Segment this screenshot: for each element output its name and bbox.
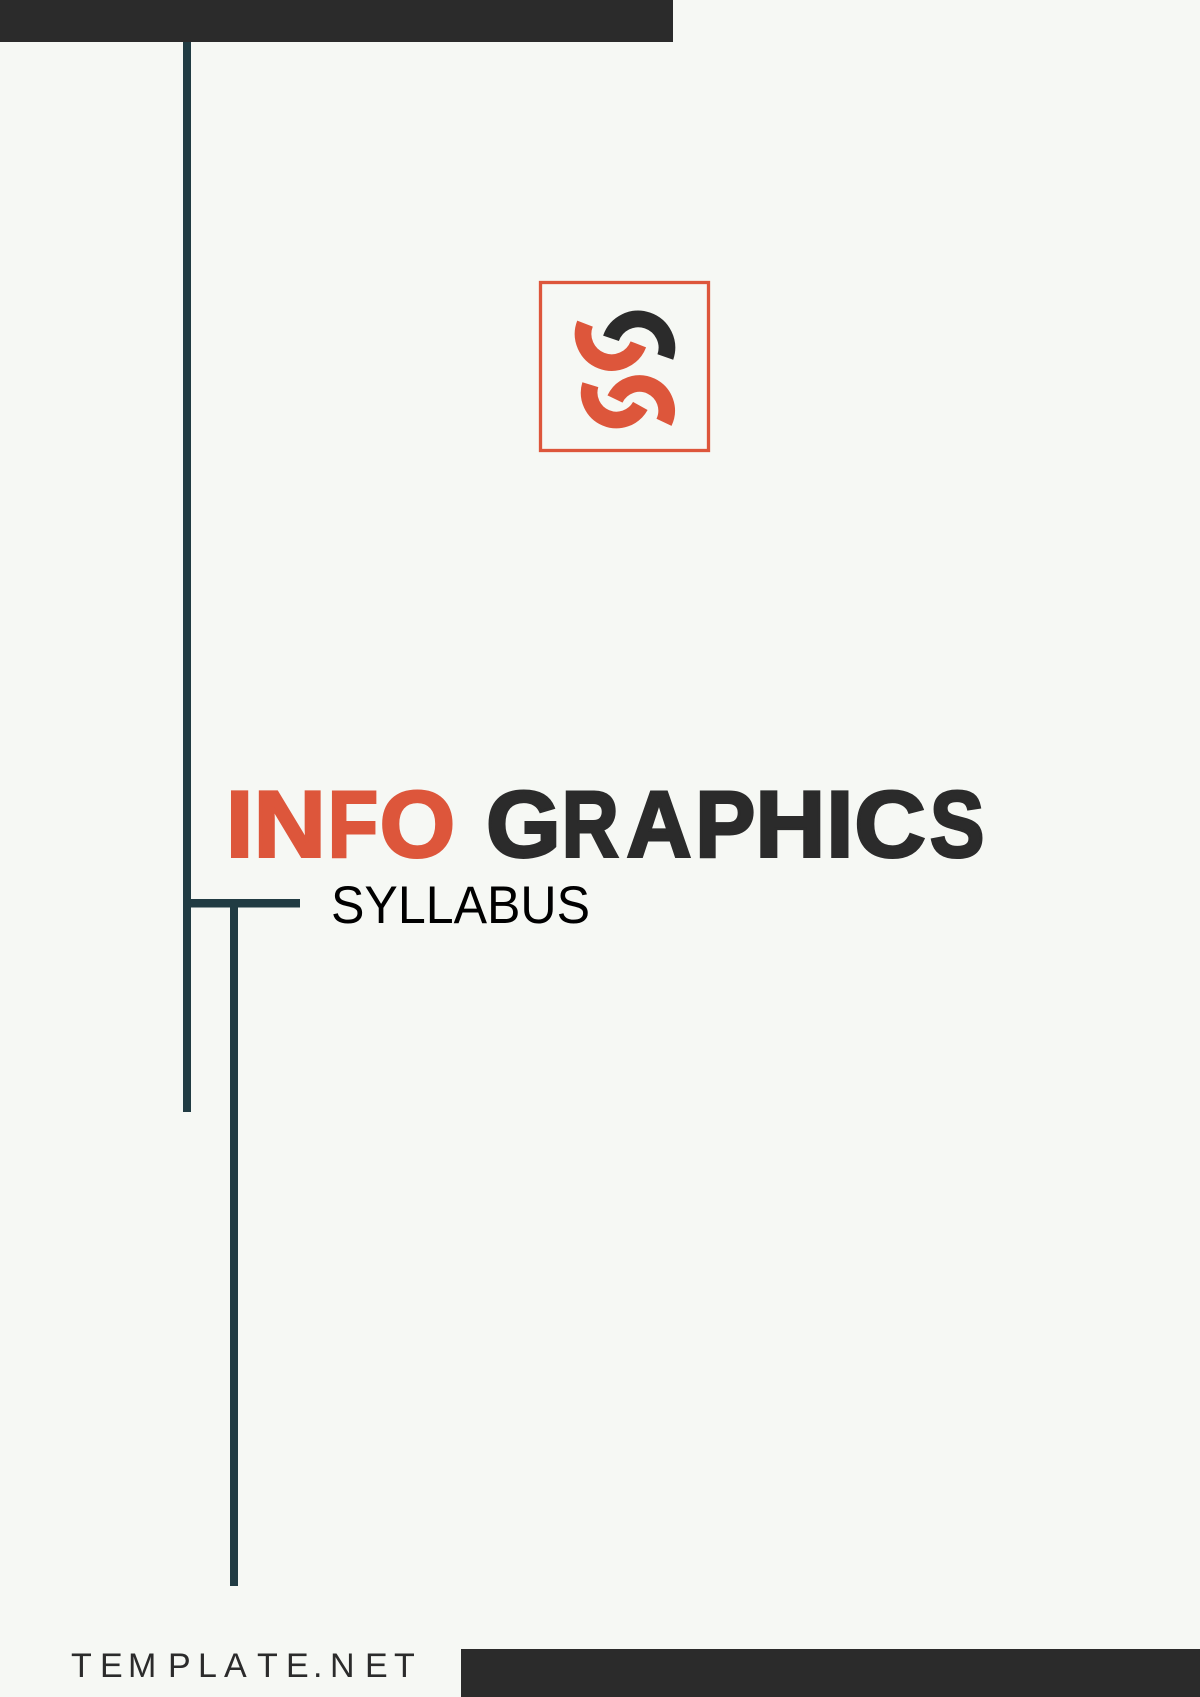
logo xyxy=(540,282,708,450)
title: INFO: N xyxy=(254,772,326,876)
logo mark: interlocking arcs xyxy=(583,319,667,422)
title: GRAPHICS: H xyxy=(755,772,825,876)
logo frame xyxy=(540,282,708,450)
title: INFO: F xyxy=(328,772,378,876)
footer text: TEMPLATE.NET: TEMPLATE.NET xyxy=(71,1647,415,1685)
title: GRAPHICS: S xyxy=(930,772,984,876)
horizontal connector line xyxy=(191,899,300,908)
title: GRAPHICS: I xyxy=(826,772,854,876)
title: GRAPHICS: C xyxy=(854,772,926,876)
top dark bar xyxy=(0,0,673,42)
subtitle: SYLLABUS: SYLLABUS xyxy=(331,876,590,935)
left vertical line xyxy=(183,42,191,1112)
second vertical line xyxy=(230,907,238,1586)
title: GRAPHICS: A xyxy=(626,772,691,876)
title: INFO: I xyxy=(226,772,253,876)
title: GRAPHICS: G xyxy=(486,772,561,876)
title: INFO: O xyxy=(380,772,455,876)
title: GRAPHICS: P xyxy=(695,772,755,876)
bottom dark bar xyxy=(461,1649,1200,1697)
title: GRAPHICS: R xyxy=(562,772,619,876)
